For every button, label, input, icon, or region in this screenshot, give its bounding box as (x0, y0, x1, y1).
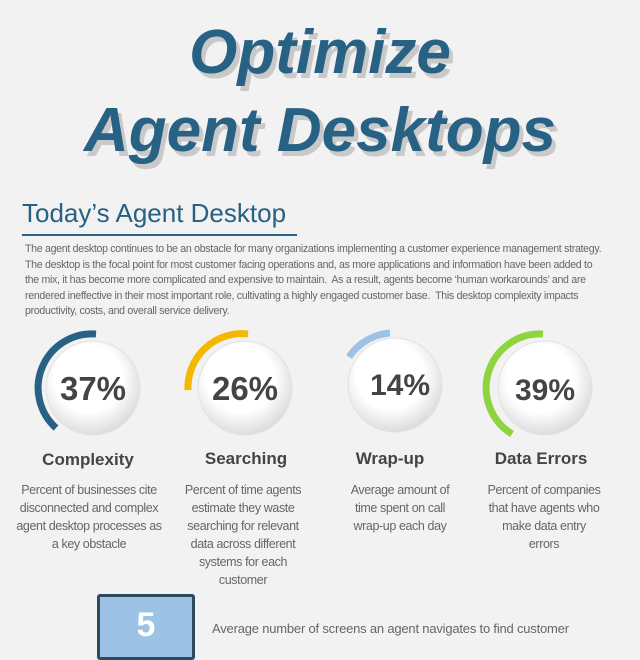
stat circle: searching (188, 334, 292, 435)
stat circle: wrap-up: 14% (370, 369, 430, 402)
intro text: productivity, costs, and overall service delivery. (25, 305, 229, 317)
intro text (25, 243, 601, 317)
stat circle: data errors: 39% (515, 374, 575, 407)
intro text: The agent desktop continues to be an obstacle for many organizations implementing a customer experience management strategy. (25, 243, 601, 255)
stat circle: complexity: 37% (60, 370, 126, 407)
number box: 5 (137, 606, 155, 644)
label: complexity: Complexity (42, 450, 134, 469)
stat circle: wrap-up (348, 333, 442, 432)
desc: searching: Percent of time agents estimate they waste searching for relevant data across different systems for each customer (185, 483, 301, 587)
title: Optimize (189, 18, 451, 87)
charts: circles (34, 330, 592, 437)
title: Agent Desktops (84, 96, 556, 165)
intro text: the mix, it has become more complicated and expensive to maintain. As a result, agents become ‘human workarounds’ and are (25, 274, 586, 286)
desc: data errors: Percent of companies that have agents who make data entry errors (488, 483, 600, 551)
label: searching: Searching (205, 449, 287, 468)
stat circle: complexity (38, 334, 140, 435)
intro text: rendered ineffective in their most important role, cultivating a highly engaged customer base. This desktop complexity impacts (25, 290, 578, 302)
desc: complexity: Percent of businesses cite disconnected and complex agent desktop processes as a key obstacle (16, 483, 162, 551)
stat circle: data errors (486, 334, 592, 435)
title (82, 18, 558, 169)
label: data errors: Data Errors (495, 449, 587, 468)
stat circle: searching: 26% (212, 370, 278, 407)
box text: Average number of screens an agent navigates to find customer (212, 621, 569, 636)
desc: wrap-up: Average amount of time spent on call wrap-up each day (351, 483, 449, 533)
number box (97, 594, 195, 660)
intro text: The desktop is the focal point for most customer facing operations and, as more applications and information have been added to (25, 258, 592, 270)
label: wrap-up: Wrap-up (356, 449, 424, 468)
heading: Today’s Agent Desktop (22, 198, 286, 228)
